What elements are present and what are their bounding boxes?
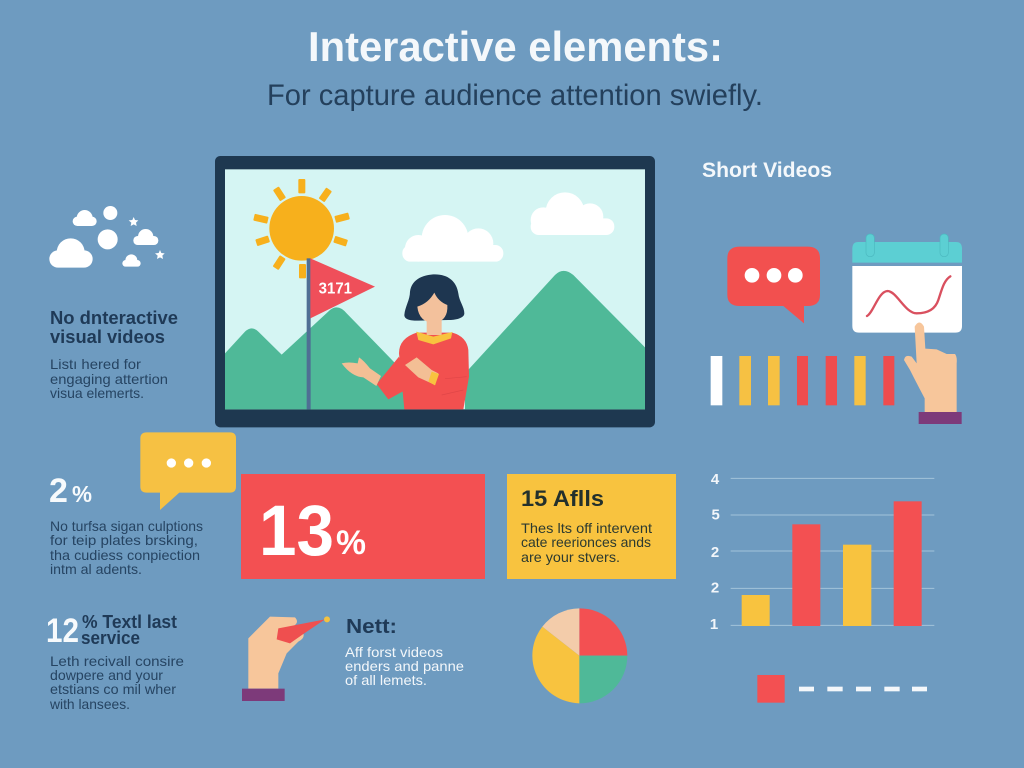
stat: 2%: 2 xyxy=(49,472,68,510)
stat: 2% xyxy=(49,472,92,510)
mountains xyxy=(225,271,645,409)
flag: 3171 xyxy=(319,281,352,298)
text block: nett: of all lemets. xyxy=(345,672,427,688)
stat: 12% text last service xyxy=(46,612,177,650)
text block: leeth xyxy=(49,653,184,712)
text block: leeth: Leth recivall consire xyxy=(50,653,184,669)
bar chart: 2 xyxy=(711,580,719,597)
bar chart: 4 xyxy=(711,471,720,488)
icon: pointing hand xyxy=(904,322,962,424)
text block: no turfsa: intm al adents. xyxy=(50,561,142,577)
bar chart xyxy=(710,471,934,633)
subtitle: For capture audience attention swiefly. xyxy=(267,79,763,112)
stat: 12% text last service: 12 xyxy=(46,612,79,650)
bar chart: 1 xyxy=(710,616,718,633)
chart legend xyxy=(757,675,927,703)
icon: sun xyxy=(253,179,350,278)
person xyxy=(342,274,469,409)
text block: list: Listı hered for xyxy=(50,356,141,372)
panel: yellow 15 Aflls: Thes lts off intervent xyxy=(521,520,652,536)
icon group: chat, calendar, bars, hand xyxy=(711,234,962,424)
stat: 2%: % xyxy=(72,481,92,507)
stat: 12% text last service: service xyxy=(81,628,140,648)
bars xyxy=(711,356,894,405)
text block: no turfsa: tha cudiess conpiection xyxy=(50,547,200,563)
text block: no turfsa: No turfsa sigan culptions xyxy=(50,518,203,534)
panel: red stat 13%: 13 xyxy=(259,492,334,571)
panel: yellow 15 Aflls: are your stvers. xyxy=(521,549,620,565)
panel: yellow 15 Aflls xyxy=(507,474,676,579)
text block: nett: Nett: xyxy=(346,616,397,638)
heading: no dnteractive: No dnteractive xyxy=(50,308,178,328)
icon: yellow speech bubble xyxy=(140,432,236,510)
heading: short videos: Short Videos xyxy=(702,159,832,182)
text block: leeth: etstians co mil wher xyxy=(50,681,176,697)
text block: leeth: dowpere and your xyxy=(50,667,163,683)
text block: nett: enders and panne xyxy=(345,658,464,674)
bar chart: 2 xyxy=(711,544,719,561)
text block: list: visua elemerts. xyxy=(50,385,144,401)
clouds xyxy=(402,192,614,262)
icon: hand holding pen xyxy=(242,616,330,701)
icon: red speech bubble xyxy=(727,247,820,323)
text block: nett: Aff forst videos xyxy=(345,644,443,660)
stat: 12% text last service: % Textl last xyxy=(82,612,177,632)
title: Interactive elements: xyxy=(308,23,723,70)
panel: red stat 13% xyxy=(241,474,485,579)
flag xyxy=(307,258,375,409)
text block: list xyxy=(50,356,168,401)
text block: leeth: with lansees. xyxy=(49,696,130,712)
text block: nett xyxy=(345,616,464,688)
heading: no dnteractive xyxy=(50,308,178,347)
heading: no dnteractive: visual videos xyxy=(50,327,165,347)
text block: no turfsa xyxy=(50,518,203,577)
pie chart xyxy=(532,608,627,703)
icon: calendar chart xyxy=(852,234,962,333)
icon: clouds and stars xyxy=(49,206,165,268)
panel: yellow 15 Aflls: 15 Aflls xyxy=(521,486,604,511)
panel: red stat 13%: % xyxy=(336,524,366,562)
text block: no turfsa: for teip plates brsking, xyxy=(50,532,198,548)
text block: list: engaging attertion xyxy=(50,371,168,387)
panel: yellow 15 Aflls: cate reerionces ands xyxy=(521,534,651,550)
panel: video monitor xyxy=(215,156,655,427)
bar chart: 5 xyxy=(711,506,720,523)
